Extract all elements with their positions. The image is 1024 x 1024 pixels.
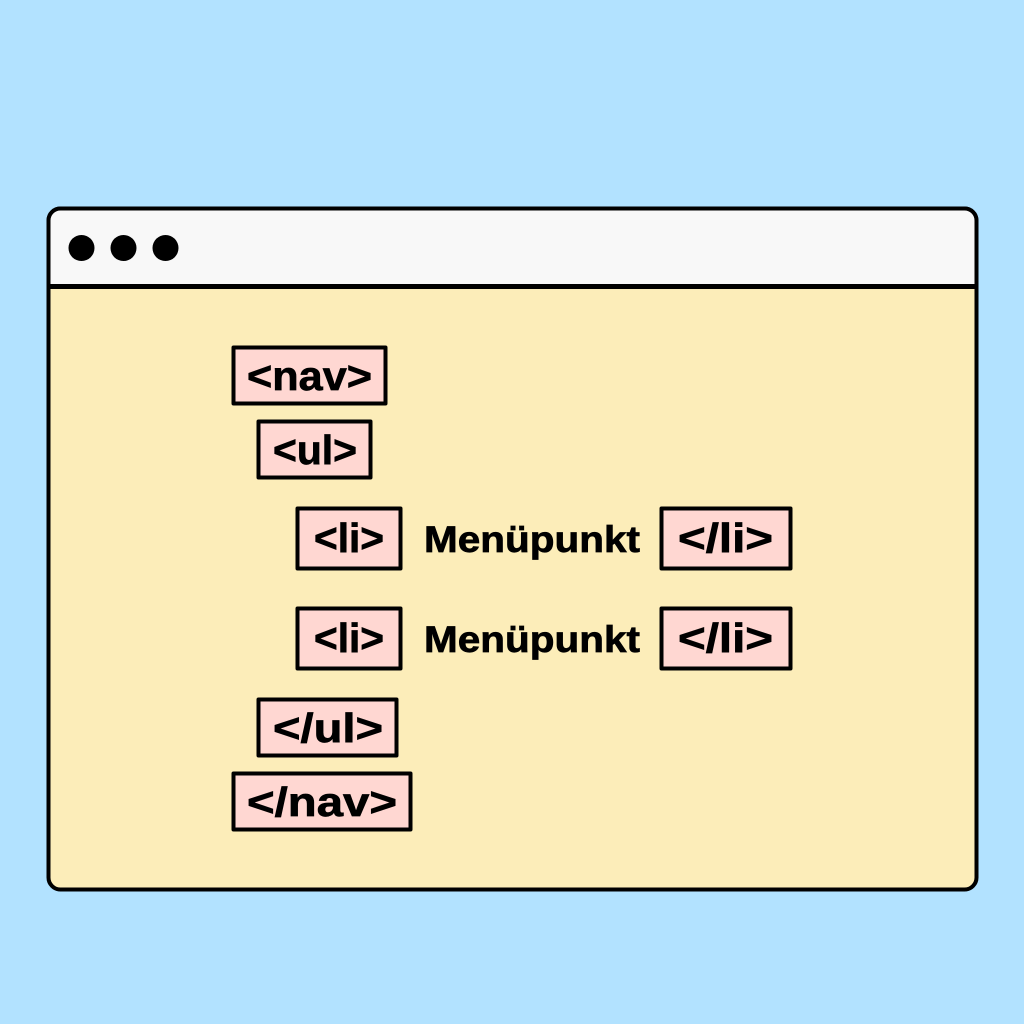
browser window: [47, 208, 978, 890]
tag: ul open: <ul>: [273, 427, 357, 473]
tag: nav close: </nav>: [247, 779, 397, 825]
tag: ul close: </ul>: [273, 705, 383, 751]
tag: li close: [662, 508, 790, 568]
tag: nav close: [234, 774, 410, 830]
tag: li open: [298, 608, 400, 668]
tag: li close: [662, 608, 790, 668]
tag: li open: [298, 508, 400, 568]
tag: li close: </li>: [678, 615, 773, 661]
list item row 1: [298, 508, 790, 568]
tag: li open: <li>: [314, 515, 384, 561]
tag: li open: <li>: [314, 615, 384, 661]
menu item label: Menüpunkt: [424, 518, 641, 560]
window title bar: [48, 208, 976, 286]
tag: ul open: [258, 422, 370, 478]
window control dots: [68, 235, 178, 261]
tag: li close: </li>: [678, 515, 773, 561]
tag: ul close: [258, 700, 396, 756]
tag: nav open: [234, 348, 386, 404]
window content area: [48, 208, 976, 890]
list item row 2: [298, 608, 790, 668]
tag: nav open: <nav>: [247, 353, 372, 399]
menu item label: Menüpunkt: [424, 618, 641, 660]
